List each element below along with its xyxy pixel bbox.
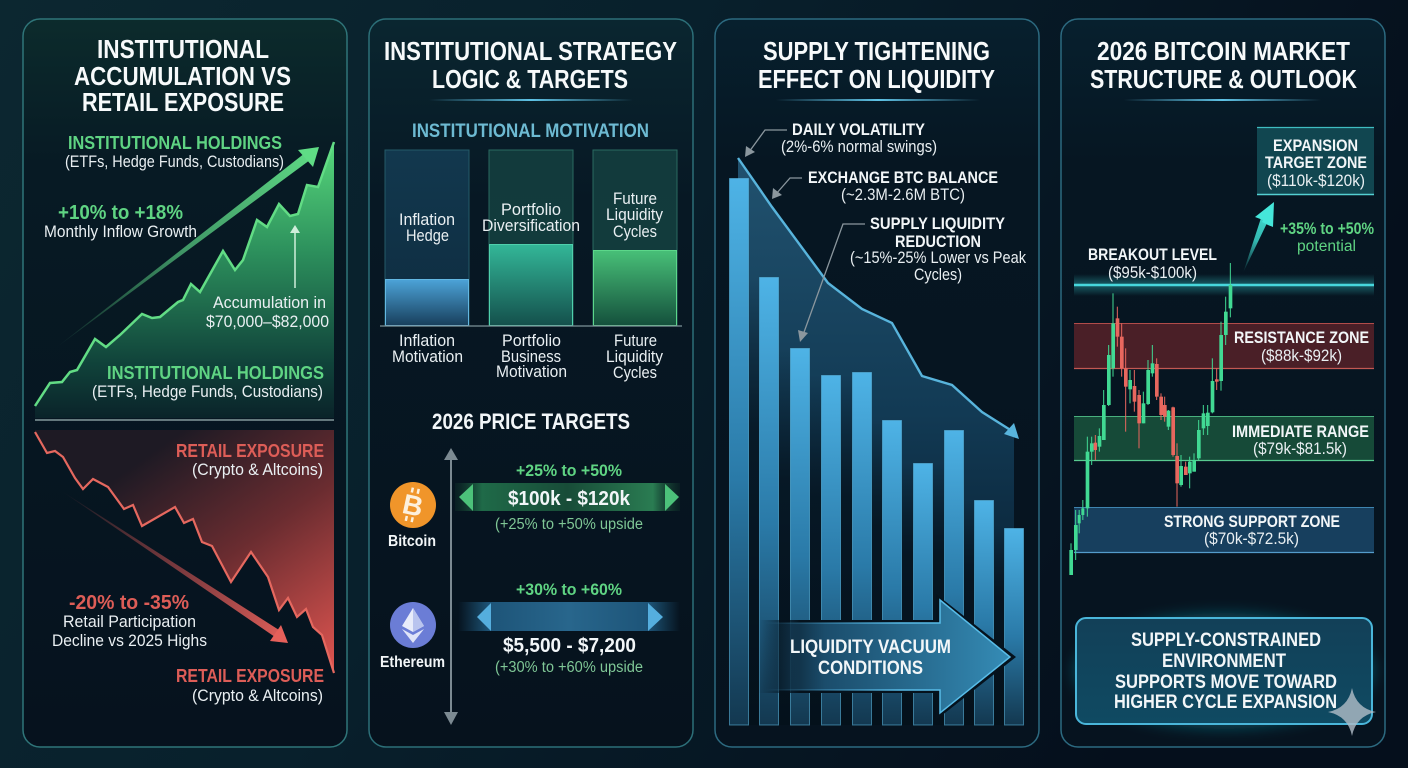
- chart: motivation bars: Cycles: [613, 364, 657, 382]
- text: monthly inflow growth: Monthly Inflow Growth: [44, 223, 197, 241]
- icon: bitcoin: [388, 482, 436, 550]
- text: accumulation range: Accumulation in: [213, 294, 326, 312]
- label: immediate range: [1232, 422, 1369, 458]
- title: EFFECT ON LIQUIDITY: [758, 64, 995, 94]
- text: accumulation range: [206, 294, 329, 331]
- zone: resistance: [1074, 323, 1374, 369]
- title: STRUCTURE & OUTLOOK: [1090, 64, 1357, 94]
- target: ethereum price range: $5,500 - $7,200: [503, 635, 636, 657]
- box: expansion target zone: TARGET ZONE: [1265, 153, 1367, 172]
- panel: institutional accumulation vs retail exposure: [23, 19, 347, 747]
- level: breakout level: BREAKOUT LEVEL: [1088, 245, 1217, 264]
- text: retail exposure bottom label: RETAIL EXPOSURE: [176, 665, 324, 686]
- chart: motivation bars: Portfolio: [501, 201, 561, 219]
- chart: retail exposure area: [35, 430, 334, 673]
- chart: motivation bars: Portfolio: [502, 332, 561, 350]
- icon: sparkle: [1328, 688, 1376, 736]
- text: retail exposure bottom label: (Crypto & Altcoins): [192, 687, 323, 705]
- chart: motivation bars: Cycles: [613, 223, 657, 241]
- text: potential: [1280, 220, 1374, 255]
- chart: motivation bars: Liquidity: [606, 206, 664, 224]
- zone: immediate range: [1074, 416, 1374, 461]
- heading: 2026 price targets: 2026 PRICE TARGETS: [432, 409, 630, 434]
- text: retail exposure top label: RETAIL EXPOSURE: [176, 440, 324, 461]
- chart: motivation bars: Hedge: [406, 227, 449, 245]
- target: ethereum price range: +30% to +60%: [516, 580, 622, 599]
- text: retail exposure bottom label: [176, 665, 324, 705]
- chart: motivation bars: Diversification: [482, 217, 580, 235]
- level: breakout level: ($95k-$100k): [1108, 264, 1197, 282]
- chart: declining balance area: [738, 158, 1019, 725]
- text: institutional holdings bottom label: INSTITUTIONAL HOLDINGS: [107, 362, 324, 383]
- callout: supply-constrained environment: [1074, 613, 1374, 729]
- callout: daily volatility: [745, 121, 937, 157]
- heading: institutional motivation: INSTITUTIONAL MOTIVATION: [412, 121, 649, 142]
- arrow: liquidity vacuum conditions: CONDITIONS: [818, 658, 923, 679]
- callout: supply liquidity reduction: [798, 215, 1027, 342]
- chart: motivation bars: Inflation: [399, 211, 455, 229]
- title: [758, 36, 995, 94]
- chart: motivation bars: Motivation: [496, 363, 567, 381]
- callout: supply liquidity reduction: SUPPLY LIQUIDITY: [870, 215, 1005, 233]
- text: monthly inflow growth: +10% to +18%: [58, 202, 183, 224]
- text: retail exposure top label: (Crypto & Altcoins): [192, 461, 323, 479]
- callout: supply liquidity reduction: Cycles): [914, 266, 962, 284]
- callout: supply liquidity reduction: (~15%-25% Lower vs Peak: [850, 249, 1027, 267]
- arrow: liquidity vacuum conditions: [758, 594, 1016, 720]
- target: ethereum price range: (+30% to +60% upside: [495, 659, 643, 676]
- chart: motivation bars: Liquidity: [606, 348, 664, 366]
- title: SUPPLY TIGHTENING: [763, 36, 990, 66]
- text: institutional holdings top label: INSTITUTIONAL HOLDINGS: [68, 132, 282, 153]
- box: expansion target zone: ($110k-$120k): [1267, 172, 1365, 190]
- label: immediate range: IMMEDIATE RANGE: [1232, 422, 1369, 441]
- zone: strong support: [1074, 507, 1374, 553]
- target: bitcoin price range: $100k - $120k: [508, 488, 631, 510]
- target: bitcoin price range: +25% to +50%: [516, 461, 622, 480]
- icon: ethereum: Ethereum: [380, 654, 445, 671]
- text: accumulation range: $70,000–$82,000: [206, 313, 329, 331]
- title: INSTITUTIONAL STRATEGY: [384, 36, 677, 66]
- chart: motivation bars: Inflation: [399, 332, 455, 350]
- chart: motivation bars: Future: [613, 190, 657, 208]
- text: retail participation decline: [52, 592, 207, 650]
- level: breakout level: [1074, 245, 1374, 296]
- chart: liquidity bars: [730, 178, 1024, 725]
- label: strong support zone: [1164, 512, 1340, 548]
- title: ACCUMULATION VS: [74, 61, 291, 91]
- text: monthly inflow growth: [44, 202, 197, 241]
- callout: daily volatility: DAILY VOLATILITY: [792, 121, 925, 139]
- label: resistance zone: [1234, 328, 1369, 365]
- text: institutional holdings bottom label: (ETFs, Hedge Funds, Custodians): [92, 383, 323, 401]
- callout: supply-constrained environment: HIGHER CYCLE EXPANSION: [1114, 692, 1337, 713]
- arrow: liquidity vacuum conditions: LIQUIDITY VACUUM: [790, 637, 951, 658]
- callout: exchange btc balance: [772, 169, 998, 204]
- chart: candlesticks: [1069, 263, 1232, 575]
- arrow: institutional trend: [53, 147, 319, 350]
- title: LOGIC & TARGETS: [432, 64, 628, 94]
- label: resistance zone: ($88k-$92k): [1261, 347, 1342, 365]
- title: [1090, 36, 1357, 94]
- text: potential: potential: [1297, 238, 1356, 255]
- box: expansion target zone: [1257, 127, 1374, 195]
- title: [74, 34, 291, 117]
- chart: motivation bars: Motivation: [392, 348, 463, 366]
- chart: motivation bars: [380, 150, 682, 382]
- title: INSTITUTIONAL: [97, 34, 269, 64]
- target: ethereum price range: [458, 580, 680, 676]
- arrow: accumulation pointer: [290, 225, 300, 288]
- text: potential: +35% to +50%: [1280, 220, 1374, 238]
- title: 2026 BITCOIN MARKET: [1097, 36, 1350, 66]
- chart: motivation bars: Business: [501, 348, 561, 366]
- text: retail exposure top label: [176, 440, 324, 479]
- callout: supply-constrained environment: SUPPORTS MOVE TOWARD: [1115, 672, 1337, 693]
- target: bitcoin price range: (+25% to +50% upside: [495, 516, 643, 533]
- icon: ethereum: [380, 602, 445, 671]
- text: retail participation decline: -20% to -35%: [69, 592, 189, 614]
- chart: motivation bars: Future: [614, 332, 657, 350]
- icon: bitcoin: B: [400, 488, 426, 523]
- arrow: retail decline: [60, 490, 288, 643]
- arrow: expansion move: [1243, 202, 1274, 273]
- arrow: vertical price axis: [444, 448, 458, 725]
- panel: 2026 bitcoin market structure and outlook: [1061, 19, 1385, 747]
- callout: supply liquidity reduction: REDUCTION: [895, 233, 981, 251]
- title: [384, 36, 677, 94]
- target: bitcoin price range: [455, 461, 680, 533]
- callout: daily volatility: (2%-6% normal swings): [781, 138, 937, 156]
- callout: supply-constrained environment: SUPPLY-CONSTRAINED: [1131, 630, 1321, 651]
- label: resistance zone: RESISTANCE ZONE: [1234, 328, 1369, 347]
- title: RETAIL EXPOSURE: [82, 87, 284, 117]
- text: retail participation decline: Retail Participation: [63, 613, 196, 631]
- label: immediate range: ($79k-$81.5k): [1253, 440, 1347, 458]
- chart: institutional holdings area: [35, 142, 334, 418]
- callout: exchange btc balance: EXCHANGE BTC BALANCE: [808, 169, 998, 187]
- callout: supply-constrained environment: ENVIRONMENT: [1162, 651, 1286, 672]
- text: retail participation decline: Decline vs 2025 Highs: [52, 632, 207, 650]
- text: institutional holdings top label: (ETFs, Hedge Funds, Custodians): [65, 153, 284, 171]
- callout: exchange btc balance: (~2.3M-2.6M BTC): [841, 186, 965, 204]
- label: strong support zone: ($70k-$72.5k): [1204, 530, 1299, 548]
- box: expansion target zone: EXPANSION: [1273, 136, 1358, 155]
- panel: supply tightening effect on liquidity: [715, 19, 1039, 747]
- panel: institutional strategy logic and targets: [369, 19, 693, 747]
- label: strong support zone: STRONG SUPPORT ZONE: [1164, 512, 1340, 531]
- icon: bitcoin: Bitcoin: [388, 533, 436, 550]
- text: institutional holdings top label: [65, 132, 284, 171]
- text: institutional holdings bottom label: [92, 362, 324, 401]
